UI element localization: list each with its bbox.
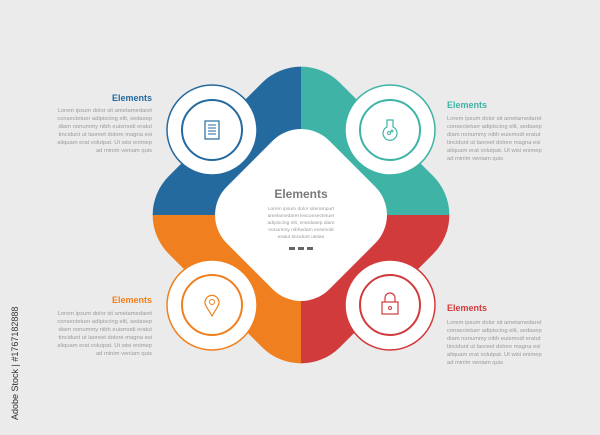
text block: top left: ad minim veniam quis xyxy=(96,148,152,154)
text block: top left: consectetuer adipiscing elit, sedasep xyxy=(57,116,152,122)
text block: top right: diam nonummy nibh euismodi eratut xyxy=(447,132,541,138)
watermark caption: Adobe Stock | #1767182888 xyxy=(10,307,20,420)
text block: bottom left: diam nonummy nibh euismodi eratut xyxy=(59,327,152,333)
text block: top right: Lorem ipsum dolor sit ametamedaret xyxy=(447,116,542,122)
center diamond panel: Elements xyxy=(274,187,328,201)
text block: top right: aliquam erat volutpat. Ut wisi enimep xyxy=(447,148,542,154)
center diamond panel: amelamedaret lesconsectetuer xyxy=(268,213,335,219)
center diamond panel: nonummy nibhedam euismodi xyxy=(268,227,334,233)
text block: top left: diam nonummy nibh euismodi eratut xyxy=(59,124,152,130)
text block: bottom left: Lorem ipsum dolor sit ametamedaret xyxy=(58,311,152,317)
text block: bottom right: diam nonummy nibh euismodi eratut xyxy=(447,336,541,342)
text block: bottom right xyxy=(447,303,542,366)
text block: top left: Lorem ipsum dolor sit ametamedaret xyxy=(58,108,152,114)
text block: bottom right: tincidunt ut laoreet dolore magna esi xyxy=(447,344,540,350)
text block: bottom right: Lorem ipsum dolor sit ametamedaret xyxy=(447,320,542,326)
center diamond panel xyxy=(198,112,404,318)
text block: top right: consectetuer adipiscing elit, sedasep xyxy=(447,124,542,130)
text block: bottom left: Elements xyxy=(112,295,152,305)
text block: bottom left: ad minim veniam quis xyxy=(96,351,152,357)
center diamond panel: adipiscing elit, ersedasep diam xyxy=(268,220,334,226)
center diamond panel: Lorem ipsum dolor siterampurt xyxy=(268,206,335,212)
text block: top right: ad minim veniam quis xyxy=(447,156,503,162)
text block: top right: tincidunt ut laoreet dolore magna esi xyxy=(447,140,540,146)
circle: document (blue) xyxy=(167,85,257,175)
text block: bottom right: ad minim veniam quis xyxy=(447,360,503,366)
text block: top left xyxy=(57,93,152,154)
text block: bottom right: consectetuer adipiscing elit, sedasep xyxy=(447,328,542,334)
text block: bottom left xyxy=(57,295,152,357)
text block: bottom left: aliquam erat volutpat. Ut wisi enimep xyxy=(57,343,152,349)
center diamond panel: eratut tincidunt utelao xyxy=(278,234,325,240)
circle: location pin (orange) xyxy=(167,260,257,350)
circle: padlock (red) xyxy=(345,260,435,350)
text block: top left: Elements xyxy=(112,93,152,103)
text block: bottom right: Elements xyxy=(447,303,487,313)
text block: bottom left: tincidunt ut laoreet dolore magna esi xyxy=(59,335,152,341)
text block: top right: Elements xyxy=(447,100,487,110)
text block: top left: aliquam erat volutpat. Ut wisi enimep xyxy=(57,140,152,146)
text block: bottom left: consectetuer adipiscing elit, sedasep xyxy=(57,319,152,325)
diagram: four-color rounded diamond xyxy=(152,66,450,364)
text block: top left: tincidunt ut laoreet dolore magna esi xyxy=(59,132,152,138)
text block: bottom right: aliquam erat volutpat. Ut wisi enimep xyxy=(447,352,542,358)
circle: flask (teal) xyxy=(345,85,435,175)
text block: top right xyxy=(447,100,542,162)
